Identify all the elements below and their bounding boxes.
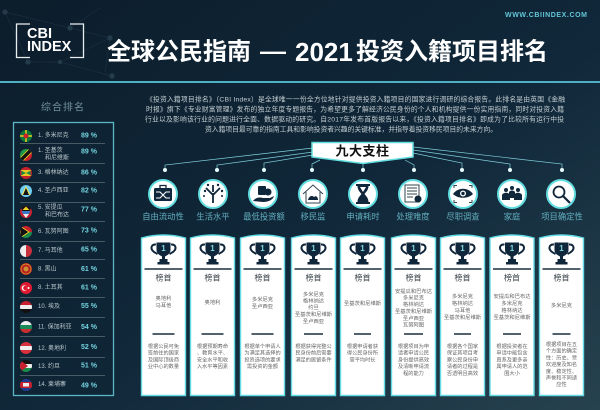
row: Cambodia: 49 % — [81, 382, 98, 390]
logo: CBI Index: INDEX — [27, 39, 72, 55]
trophy icon — [550, 242, 573, 264]
card: processing time: 榜首 — [354, 272, 370, 282]
card: certainty of product: 性：历史、受 — [546, 353, 577, 361]
trophy icon — [152, 242, 175, 264]
card: due diligence: 否透明且高效 — [447, 369, 479, 377]
trophy icon — [500, 242, 524, 264]
card: residence: 根据获得完整公 — [295, 342, 332, 350]
row: Vanuatu: 6. 瓦努阿图 — [38, 227, 69, 235]
title: — — [260, 38, 286, 66]
logo: CBI Index: CBI — [27, 26, 52, 42]
card: ease of processing: 圣卢西亚 — [403, 314, 425, 322]
card: processing time: 需平均时长 — [350, 355, 376, 363]
pillar: family — [498, 180, 526, 222]
title: 2021 — [295, 37, 353, 67]
card: ease of processing: 身份提供高效 — [398, 355, 430, 363]
banner: nine pillars: 九大支柱 — [335, 144, 390, 158]
trophy icon: 1 — [510, 244, 515, 253]
row: Montenegro: 61 % — [81, 266, 98, 273]
card: residence: 多米尼克 — [303, 290, 325, 298]
row: Saint Kitts and Nevis: 1. 圣基茨 — [38, 146, 63, 154]
card: freedom of movement — [142, 235, 186, 396]
card: standard of living: 、教育水平、 — [197, 349, 228, 357]
card: standard of living: 入水平等因素 — [197, 362, 228, 370]
row: Antigua and Barbuda: 77 % — [81, 206, 98, 214]
row: Montenegro — [20, 263, 98, 275]
trophy icon: 1 — [360, 244, 365, 253]
panel: overall ranking list — [14, 122, 114, 396]
row: Turkey: 61 % — [81, 284, 98, 292]
row: Grenada — [20, 167, 98, 179]
pillar: processing time — [346, 180, 380, 222]
row: Dominica: 89 % — [81, 132, 98, 140]
card: family: 围大小 — [504, 369, 521, 377]
row: Jordan — [20, 360, 98, 372]
card: minimum investment: 圣卢西亚 — [252, 302, 274, 310]
card: minimum investment: 根据单个申请人 — [244, 342, 281, 350]
card: standard of living: 奥地利 — [205, 298, 220, 306]
card: minimum investment: 为满足其选择的 — [244, 349, 281, 357]
card: due diligence: 察公民身份申 — [447, 355, 478, 363]
pillar: minimum investment — [243, 180, 285, 222]
card: due diligence — [440, 235, 484, 396]
card: minimum investment — [240, 235, 284, 396]
card: processing time — [340, 235, 384, 396]
card: ease of processing — [392, 235, 436, 396]
row: Grenada: 3. 格林纳达 — [38, 168, 69, 176]
row: Malta: 7. 马耳他 — [38, 246, 63, 254]
row: Montenegro: 8. 黑山 — [38, 264, 57, 272]
card: minimum investment: 榜首 — [254, 272, 270, 282]
trophy icon — [351, 242, 374, 264]
row: Cambodia: 14. 柬埔寨 — [38, 380, 66, 388]
row: Malta — [20, 245, 98, 257]
row: Vanuatu: 73 % — [81, 228, 98, 234]
pillar: certainty of product: 项目确定性 — [541, 212, 583, 222]
row: Bulgaria — [20, 321, 98, 333]
trophy icon: 1 — [260, 244, 265, 253]
card: freedom of movement: 签前往的国家 — [148, 349, 179, 357]
trophy icon — [302, 242, 325, 264]
heading: overall ranking: 综合排名 — [41, 100, 85, 114]
card: due diligence: 马耳他 — [455, 306, 471, 314]
row: Vanuatu — [20, 226, 98, 238]
card: certainty of product: 度、稳定性、 — [546, 367, 577, 375]
card: ease of processing: 瓦努阿图 — [403, 320, 424, 328]
card: residence: 圣卢西亚 — [303, 317, 325, 325]
card: residence: 榜首 — [306, 272, 322, 282]
card: ease of processing: 多米尼克 — [403, 294, 425, 302]
card: ease of processing: 请者申请公民 — [398, 349, 429, 357]
row: Antigua and Barbuda — [20, 203, 98, 218]
trophy icon: 1 — [161, 244, 166, 253]
trophy icon — [402, 242, 425, 264]
card: certainty of product: 个方面的确定 — [546, 347, 577, 355]
card: family: 属申请人的范 — [496, 362, 528, 370]
row: Austria: 12. 奥地利 — [38, 344, 66, 352]
card: due diligence: 格林纳达 — [452, 299, 474, 307]
card: ease of processing: 圣基茨和尼维斯 — [395, 307, 433, 315]
row: Saint Lucia — [20, 185, 98, 197]
row: Dominica — [20, 130, 98, 142]
trophy icon: 1 — [311, 244, 316, 253]
card: family: 格林纳达 — [501, 306, 523, 314]
trophy icon — [451, 242, 474, 264]
row: Austria — [20, 342, 98, 354]
row: Saint Lucia: 82 % — [81, 188, 98, 194]
intro text block: 时报》旗下《专业财富管理》发布的独立年度专题报告，为希望更多了解经济公民身份的个人和机构提供一份实用指南，同时对投资入籍 — [146, 104, 564, 114]
website url: WWW.CBIINDEX.COM — [505, 12, 587, 19]
pillar: residence — [299, 180, 327, 222]
card: due diligence: 榜首 — [454, 272, 470, 282]
card: residence: 约旦 — [308, 303, 319, 311]
card: minimum investment: 需投资的金额 — [247, 362, 279, 370]
pillar: freedom of movement: 自由流动性 — [142, 212, 184, 222]
banner: nine pillars — [312, 142, 413, 164]
card: family: 申请中能包含 — [496, 349, 528, 357]
row: Turkey — [20, 282, 98, 294]
row: Turkey: 8. 土耳其 — [38, 283, 63, 291]
pillar: residence: 移民监 — [301, 212, 325, 222]
card: certainty of product: 应性 — [556, 380, 567, 388]
card: family: 根据投资者在 — [496, 342, 528, 350]
pillar: ease of processing: 处理难度 — [396, 212, 430, 222]
intro text block — [145, 94, 565, 134]
intro text block: 《投资入籍项目排名》（CBI Index）是全球唯一一份全方位地针对提供投资入籍项目的国家进行调研的综合报告。此排名是由英国《金融 — [146, 94, 565, 104]
card: due diligence: 根据各个国家 — [447, 342, 478, 350]
connector lines from banner to pillars — [163, 147, 564, 172]
card: ease of processing: 榜首 — [406, 272, 422, 282]
card: freedom of movement: 奥地利 — [156, 294, 171, 302]
trophy icon: 1 — [559, 244, 564, 253]
card: due diligence: 圣基茨和尼维斯 — [444, 313, 482, 321]
card: ease of processing: 根据项目为申 — [398, 342, 429, 350]
row: Egypt: 10. 埃及 — [38, 302, 60, 310]
row: Cambodia — [20, 379, 98, 391]
card: family — [490, 235, 534, 396]
card: residence: 满足的居留条件 — [295, 355, 332, 363]
pillar: family: 家庭 — [504, 212, 520, 222]
row: Grenada: 86 % — [81, 170, 98, 176]
trophy icon: 1 — [411, 244, 416, 253]
card: freedom of movement: 及国际顶级商 — [148, 355, 179, 363]
card: family: 圣基茨和尼维斯 — [493, 313, 531, 321]
card: freedom of movement: 马耳他 — [156, 301, 172, 309]
pillar: standard of living: 生活水平 — [196, 212, 230, 222]
row: Jordan: 51 % — [81, 362, 98, 370]
pillar: due diligence: 尽职调查 — [446, 212, 480, 222]
row: Bulgaria: 54 % — [81, 324, 98, 331]
card: family: 直系及更多亲 — [496, 355, 528, 363]
card: certainty of product: 榜首 — [554, 272, 570, 282]
row: Antigua and Barbuda: 5. 安提瓜 — [38, 203, 63, 211]
card: family: 安提瓜和巴布达 — [493, 292, 531, 300]
row: Saint Kitts and Nevis: 和尼维斯 — [45, 154, 69, 162]
row: Saint Lucia: 4. 圣卢西亚 — [38, 186, 69, 194]
card: standard of living: 根据预期寿命 — [197, 342, 229, 350]
card: family: 榜首 — [504, 272, 520, 282]
pillar: freedom of movement — [142, 180, 184, 222]
card: certainty of product — [540, 235, 584, 396]
pillar: minimum investment: 最低投资额 — [243, 212, 285, 222]
card: ease of processing: 安提瓜和巴布达 — [395, 287, 433, 295]
trophy icon: 1 — [210, 244, 215, 253]
title: 投资入籍项目排名 — [356, 38, 548, 66]
card: residence: 格林纳达 — [303, 296, 325, 304]
trophy icon: 1 — [460, 244, 465, 253]
row: Dominica: 1. 多米尼克 — [38, 131, 69, 139]
card: certainty of product: 声誉和不同适 — [546, 374, 577, 382]
trophy icon — [201, 242, 224, 264]
card: family: 多米尼克 — [501, 299, 523, 307]
card: freedom of movement: 业中心的数量 — [148, 362, 179, 370]
row: Egypt — [20, 301, 98, 313]
row: Austria: 52 % — [81, 344, 98, 351]
card: processing time: 根据申请者获 — [347, 342, 378, 350]
card: certainty of product: 根据项目在五 — [546, 340, 577, 348]
card: due diligence: 请者的过程是 — [447, 362, 478, 370]
card: certainty of product: 欢迎度及知名 — [546, 360, 577, 368]
card: ease of processing: 格林纳达 — [403, 300, 425, 308]
card: freedom of movement: 榜首 — [156, 272, 172, 282]
card: standard of living — [190, 235, 234, 396]
card: standard of living: 榜首 — [204, 272, 220, 282]
row: Bulgaria: 11. 保加利亚 — [38, 322, 72, 330]
card: processing time: 得公民身份所 — [347, 349, 378, 357]
logo: CBI Index — [16, 24, 84, 58]
card: processing time: 圣基茨和尼维斯 — [344, 299, 382, 307]
title: 全球公民指南 — [107, 38, 251, 66]
card: ease of processing: 程的能力 — [403, 369, 424, 377]
pillar: standard of living — [196, 180, 230, 222]
card: residence — [292, 235, 336, 396]
pillar: certainty of product — [541, 180, 583, 222]
card: ease of processing: 及清晰申请流 — [398, 362, 429, 370]
card: residence: 民身份前后需要 — [295, 349, 332, 357]
card: residence: 圣基茨和尼维斯 — [295, 310, 333, 318]
card: due diligence: 多米尼克 — [452, 292, 474, 300]
pillar: due diligence — [446, 180, 480, 222]
card: freedom of movement: 根据公民可免 — [148, 342, 179, 350]
row: Saint Kitts and Nevis — [20, 146, 98, 162]
title — [107, 37, 548, 67]
row: Jordan: 13. 约旦 — [38, 362, 60, 370]
trophy icon — [251, 242, 274, 264]
intro text block: 行业以及影响该行业的问题进行全面、数据驱动的研究。自2017年发布首版报告以来，《投资入籍项目排名》即成为了比较所有运行中投 — [145, 114, 564, 124]
row: Malta: 65 % — [81, 246, 98, 254]
card: certainty of product: 多米尼克 — [551, 301, 573, 309]
pillar: ease of processing — [396, 180, 430, 222]
row: Egypt: 55 % — [81, 303, 98, 310]
card: minimum investment: 投资选项的要求 — [244, 355, 281, 363]
intro text block: 资入籍项目最可靠的指南工具和影响投资者兴趣的关键标准，并指导着投资移民项目的未来方向。 — [205, 124, 497, 134]
row: Saint Kitts and Nevis: 89 % — [81, 148, 98, 156]
pillar: processing time: 申请耗时 — [346, 212, 380, 222]
row: Antigua and Barbuda: 和巴布达 — [45, 210, 69, 218]
card: due diligence: 保证其项目考 — [447, 349, 478, 357]
card: minimum investment: 多米尼克 — [252, 295, 274, 303]
card: standard of living: 安全水平和收 — [197, 355, 228, 363]
